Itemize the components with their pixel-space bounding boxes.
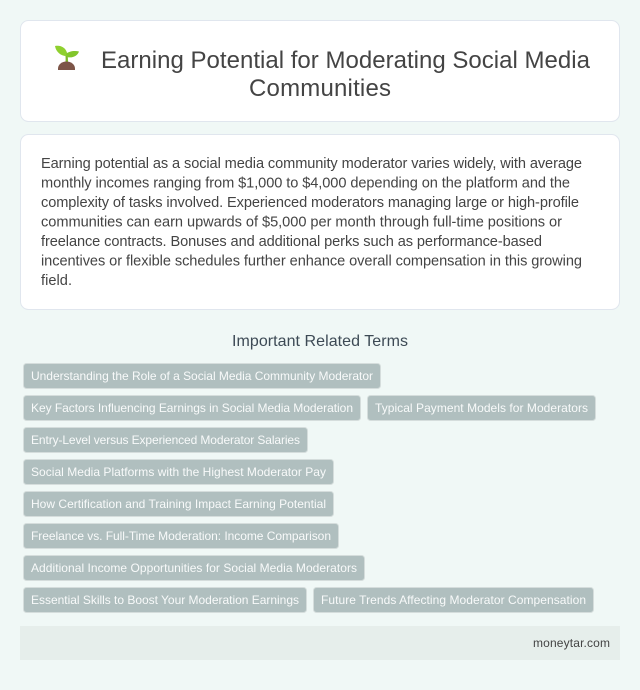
panel: title card [20, 20, 620, 122]
icon: sprout [55, 46, 79, 70]
tag list [24, 364, 596, 612]
tag [314, 588, 594, 612]
tag: Future Trends Affecting Moderator Compensation [321, 593, 586, 607]
tag [24, 396, 360, 420]
text block: description paragraph: Earning potential as a social media community moderator varies widely, with average [41, 156, 582, 172]
tag: Understanding the Role of a Social Media Community Moderator [31, 369, 373, 383]
text block: description paragraph: complexity of tasks involved. Experienced moderators managing large or high-profile [41, 195, 579, 211]
tag: Entry-Level versus Experienced Moderator Salaries [31, 433, 300, 447]
tag: How Certification and Training Impact Earning Potential [31, 497, 326, 511]
tag [24, 364, 380, 388]
panel: description [20, 134, 620, 310]
title [101, 47, 591, 102]
text block: description paragraph: field. [41, 273, 72, 289]
tag [24, 524, 338, 548]
text block: description paragraph: incentives or flexible schedules further enhance overall compensation in this growing [41, 254, 582, 270]
text block: description paragraph [41, 156, 582, 289]
tag: Typical Payment Models for Moderators [375, 401, 588, 415]
tag: Key Factors Influencing Earnings in Social Media Moderation [31, 401, 353, 415]
tag [368, 396, 596, 420]
tag [24, 428, 308, 452]
text block: description paragraph: communities can earn upwards of $5,000 per month through full-time positions or [41, 214, 562, 230]
tag: Freelance vs. Full-Time Moderation: Income Comparison [31, 529, 331, 543]
footer: source credit: moneytar.com [533, 636, 610, 650]
tag: Social Media Platforms with the Highest Moderator Pay [31, 465, 326, 479]
tag [24, 460, 334, 484]
tag: Essential Skills to Boost Your Moderation Earnings [31, 593, 299, 607]
heading: related terms: Important Related Terms [232, 333, 408, 350]
footer [20, 626, 620, 660]
tag [24, 588, 306, 612]
title: Earning Potential for Moderating Social Media [101, 47, 591, 74]
tag: Additional Income Opportunities for Social Media Moderators [31, 561, 357, 575]
text block: description paragraph: monthly incomes ranging from $1,000 to $4,000 depending on the platform and the [41, 176, 570, 192]
title: Communities [249, 75, 391, 102]
text block: description paragraph: freelance contracts. Bonuses and additional perks such as performance-based [41, 234, 542, 250]
tag [24, 556, 364, 580]
tag [24, 492, 334, 516]
